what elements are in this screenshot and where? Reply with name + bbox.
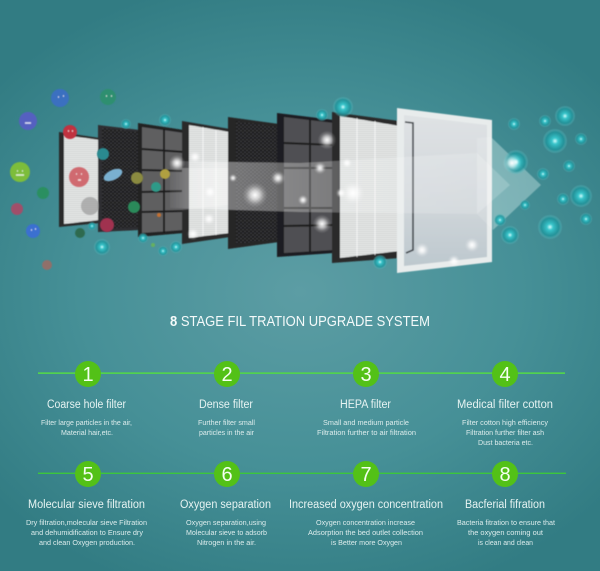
step 5: 5 xyxy=(82,464,94,486)
filter 4: HEPA xyxy=(182,121,230,244)
step 5: and dehumidification to Ensure dry xyxy=(31,530,144,537)
step 7: is Better more Oxygen xyxy=(331,540,402,547)
filter 6: grey grid xyxy=(277,113,334,257)
step 8 xyxy=(457,461,555,547)
step 6: Nitrogen in the air. xyxy=(197,540,256,547)
step 4 xyxy=(457,361,553,447)
step 3: Small and medium particle xyxy=(323,420,409,427)
airflow arrow xyxy=(170,137,541,230)
step 1: Filter large particles in the air, xyxy=(41,420,132,427)
step 4: Medical filter cotton xyxy=(457,399,553,411)
filter 1: coarse xyxy=(59,132,100,227)
filter 5: carbon mesh xyxy=(228,117,279,249)
step 7: Adsorption the bed outlet collection xyxy=(308,530,423,537)
step 1 xyxy=(41,361,132,437)
step 6: Oxygen separation xyxy=(180,499,271,511)
step 8: Bacteria fitration to ensure that xyxy=(457,520,555,527)
step 4: Dust bacteria etc. xyxy=(478,440,533,447)
step 2: Further filter small xyxy=(198,420,255,427)
step 2: particles in the air xyxy=(199,430,255,437)
step 5: Molecular sieve filtration xyxy=(28,499,145,511)
step 1: Coarse hole filter xyxy=(47,399,126,411)
step 4: 4 xyxy=(499,364,511,386)
step 5 xyxy=(26,461,147,547)
step 7: 7 xyxy=(360,464,372,486)
step 3 xyxy=(317,361,416,437)
step 8: Bacferial fifration xyxy=(465,499,545,511)
step 4: Filter cotton high efficiency xyxy=(462,420,549,427)
connector line 1 xyxy=(38,372,565,374)
step 8: is clean and clean xyxy=(478,540,533,547)
step 3: 3 xyxy=(360,364,372,386)
step 8: the oxygen coming out xyxy=(468,530,543,537)
step 2 xyxy=(198,361,255,437)
filter 2: dense mesh xyxy=(98,125,140,232)
step 8: 8 xyxy=(499,464,511,486)
step 5: Dry filtration,molecular sieve Filtration xyxy=(26,520,147,527)
white air bubbles on filters xyxy=(169,131,521,267)
step 4: Filtration further filter ash xyxy=(466,430,544,437)
step 3: Filtration further to air filtration xyxy=(317,430,416,437)
step 6 xyxy=(180,461,271,547)
filter 3: grid xyxy=(138,123,184,237)
filter 8: white cotton xyxy=(397,108,492,273)
filter stack illustration xyxy=(59,108,541,273)
connector line 2 xyxy=(38,473,566,474)
step 7: Oxygen concentration increase xyxy=(316,520,415,527)
oxygen bubbles xyxy=(88,97,592,269)
step 2: 2 xyxy=(221,364,233,386)
step 6: Molecular sieve to adsorb xyxy=(186,530,267,537)
step 2: Dense filter xyxy=(199,399,253,411)
step 7: Increased oxygen concentration xyxy=(289,499,443,511)
step 6: Oxygen separation,using xyxy=(186,520,266,527)
step 3: HEPA filter xyxy=(340,399,391,411)
step 6: 6 xyxy=(221,464,233,486)
step 1: 1 xyxy=(82,364,94,386)
filter 7: HEPA pleated xyxy=(332,112,414,263)
step 1: Material hair,etc. xyxy=(61,430,113,437)
airflow shaft highlight xyxy=(182,168,228,210)
step row 1 xyxy=(38,361,565,447)
step row 2 xyxy=(26,461,566,547)
step 5: and clean Oxygen production. xyxy=(39,540,135,547)
step 7 xyxy=(289,461,443,547)
title: 8 STAGE FIL TRATION UPGRADE SYSTEM xyxy=(170,313,430,330)
bacteria and pollutants xyxy=(10,89,170,270)
